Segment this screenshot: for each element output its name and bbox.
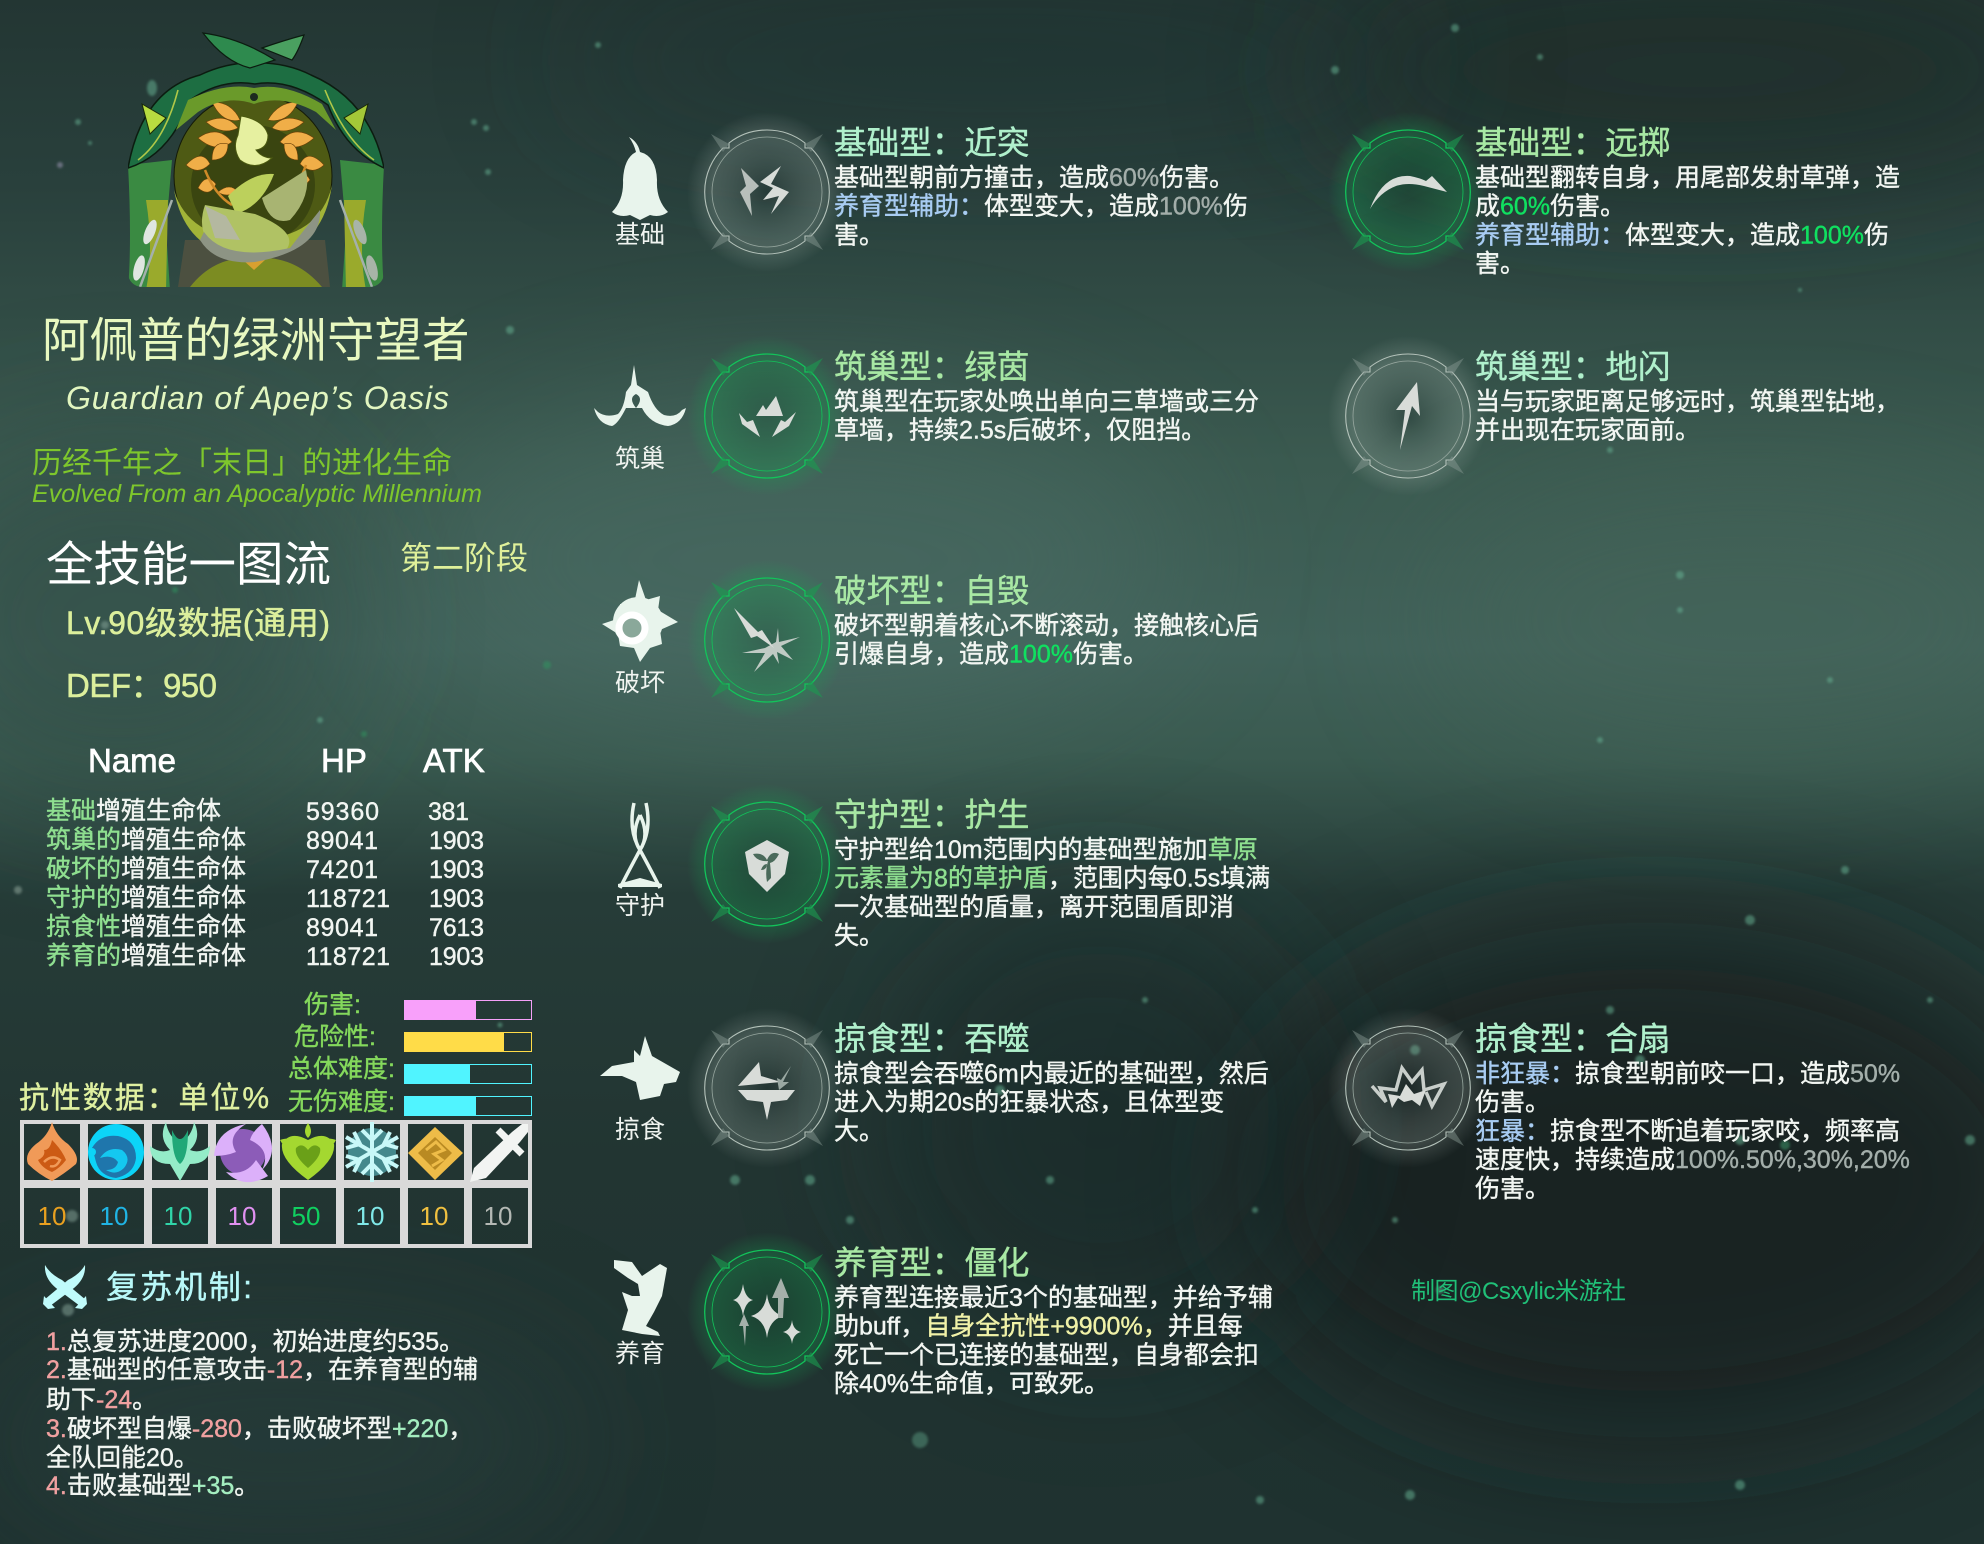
skill: basic melee — [687, 112, 1248, 272]
icon: pyro — [27, 1122, 77, 1181]
enemy type: guardian: 守护 — [615, 892, 665, 920]
skill: nest mycelium — [687, 336, 1259, 496]
stats table: ATK — [423, 742, 485, 779]
enemy type: basic — [612, 137, 668, 249]
rating bars: 总体难度: — [288, 1055, 395, 1083]
rating bars: 伤害: — [304, 991, 361, 1019]
stats table: 筑巢的增殖生命体 — [46, 826, 246, 854]
rating bars — [288, 991, 532, 1116]
skill: basic ranged: 养育型辅助：体型变大，造成100%伤 — [1475, 221, 1889, 249]
skill: wrecker self-destruct: 破坏型朝着核心不断滚动，接触核心后 — [834, 612, 1259, 640]
level label: Lv.90级数据(通用) — [66, 605, 330, 641]
skill: nest mycelium: 筑巢型在玩家处唤出单向三草墙或三分 — [834, 388, 1259, 416]
skill: predator snap: 掠食型：合扇 — [1475, 1020, 1670, 1057]
skill: basic ranged: 基础型：远掷 — [1475, 124, 1670, 161]
icon: hydro — [88, 1124, 144, 1180]
resistance table: 10 — [38, 1201, 66, 1231]
resistance table: 10 — [100, 1201, 128, 1231]
skill: wrecker self-destruct: 破坏型：自毁 — [834, 572, 1029, 609]
stats table: 89041 — [306, 827, 378, 855]
stats table: HP — [321, 742, 367, 779]
stats table: 7613 — [429, 914, 484, 942]
stats table: 74201 — [306, 856, 378, 884]
skill: predator snap: 狂暴：掠食型不断追着玩家咬，频率高 — [1475, 1117, 1900, 1145]
skill icon: lightning — [687, 112, 847, 272]
skill: guardian shield — [687, 784, 1270, 950]
enemy type: nest — [594, 365, 686, 473]
revival list: 3.破坏型自爆-280，击败破坏型+220， — [46, 1415, 473, 1443]
enemy type: nurturer — [614, 1260, 667, 1368]
revival list: 1.总复苏进度2000，初始进度约535。 — [46, 1328, 464, 1356]
tagline: Chinese: 历经千年之「末日」的进化生命 — [32, 447, 452, 480]
skill: guardian shield: 守护型：护生 — [834, 796, 1029, 833]
stats table: 118721 — [306, 943, 390, 971]
skill: basic melee: 基础型朝前方撞击，造成60%伤害。 — [834, 164, 1234, 192]
credit: 制图@Csxylic米游社 — [1411, 1278, 1626, 1305]
enemy type: predator — [600, 1036, 680, 1144]
resistance table: 10 — [164, 1201, 192, 1231]
resistance table: 10 — [420, 1201, 448, 1231]
revival list: 4.击败基础型+35。 — [46, 1472, 259, 1500]
stats table: 掠食性增殖生命体 — [46, 913, 246, 941]
stats table: 基础增殖生命体 — [46, 797, 221, 825]
stats table: 1903 — [429, 943, 484, 971]
revival list: 2.基础型的任意攻击-12，在养育型的辅 — [46, 1356, 478, 1384]
skill: predator snap: 速度快，持续造成100%.50%,30%,20% — [1475, 1146, 1910, 1174]
revival list — [46, 1328, 478, 1500]
resistance table: 10 — [228, 1201, 256, 1231]
skill icon: spikes — [687, 336, 847, 496]
skill: guardian shield: 失。 — [834, 922, 884, 950]
stats table: 381 — [428, 798, 469, 826]
skill: basic ranged — [1328, 112, 1900, 278]
enemy type: wrecker — [602, 580, 678, 697]
resistance heading: 抗性数据：单位% — [19, 1082, 269, 1115]
skill: wrecker self-destruct — [687, 560, 1259, 720]
skill icon: up arrow — [1328, 336, 1488, 496]
stage label: 第二阶段 — [400, 540, 528, 576]
icon: physical sword — [470, 1124, 528, 1182]
enemy type: guardian — [615, 803, 665, 920]
skill: predator devour: 大。 — [834, 1117, 884, 1145]
revival list: 全队回能20。 — [46, 1444, 199, 1472]
skill: guardian shield: 一次基础型的盾量，离开范围盾即消 — [834, 893, 1234, 921]
portrait: Guardian of Apep's Oasis — [128, 33, 384, 290]
stats table: 1903 — [429, 827, 484, 855]
skill icon: shield — [687, 784, 847, 944]
icon: spiked ball — [602, 580, 678, 662]
stats table: Name — [88, 742, 176, 779]
stats table: 破坏的增殖生命体 — [46, 855, 246, 883]
skill: nest mycelium: 筑巢型：绿茵 — [834, 348, 1029, 385]
icon: cryo — [346, 1122, 398, 1182]
stats table: 守护的增殖生命体 — [46, 884, 246, 912]
icon: electro — [214, 1124, 272, 1182]
skill icon: sparkles — [687, 1232, 847, 1392]
enemy type: nurturer: 养育 — [615, 1340, 665, 1368]
skill: nest burrow flash: 并出现在玩家面前。 — [1475, 417, 1700, 445]
resistance table: 10 — [484, 1201, 512, 1231]
stats table: 1903 — [429, 885, 484, 913]
skill: nest burrow flash: 当与玩家距离足够远时，筑巢型钻地， — [1475, 388, 1900, 416]
title: Chinese name: 阿佩普的绿洲守望者 — [42, 315, 470, 368]
skill: nurturer petrify: 养育型：僵化 — [834, 1244, 1029, 1281]
skill: nurturer petrify: 助buff，自身全抗性+9900%，并且每 — [834, 1313, 1243, 1341]
stats table — [46, 742, 485, 971]
skill: basic melee: 养育型辅助：体型变大，造成100%伤 — [834, 193, 1248, 221]
icon: geo — [408, 1127, 463, 1180]
skill icon: curved arrow — [1328, 112, 1488, 272]
resistance table: 50 — [292, 1201, 320, 1231]
skill: nest burrow flash: 筑巢型：地闪 — [1475, 348, 1670, 385]
stats table: 89041 — [306, 914, 378, 942]
skill: nurturer petrify: 除40%生命值，可致死。 — [834, 1370, 1109, 1398]
skill icon: bite — [687, 1008, 847, 1168]
tagline: English: Evolved From an Apocalyptic Millennium — [32, 480, 482, 508]
stats table: 59360 — [306, 798, 379, 826]
stats table: 养育的增殖生命体 — [46, 942, 246, 970]
resistance table — [20, 1120, 532, 1248]
icon: bell — [612, 137, 668, 220]
skill: predator devour: 掠食型：吞噬 — [834, 1020, 1029, 1057]
skill: nest mycelium: 草墙，持续2.5s后破坏，仅阻挡。 — [834, 417, 1206, 445]
icon: crossed swords — [43, 1265, 87, 1309]
enemy type: basic: 基础 — [615, 221, 665, 249]
skill: basic melee: 害。 — [834, 221, 884, 249]
enemy type: nest: 筑巢 — [615, 445, 665, 473]
skill icon: jaws — [1328, 1008, 1488, 1168]
skill: predator snap: 伤害。 — [1475, 1175, 1550, 1203]
skill: predator devour: 掠食型会吞噬6m内最近的基础型，然后 — [834, 1060, 1269, 1088]
resistance table: 10 — [356, 1201, 384, 1231]
skill: predator snap — [1328, 1008, 1910, 1203]
icon: shark — [600, 1036, 680, 1100]
skill: predator devour — [687, 1008, 1269, 1168]
skill: predator snap: 伤害。 — [1475, 1089, 1550, 1117]
icon: anemo — [150, 1122, 210, 1181]
skill: nurturer petrify: 养育型连接最近3个的基础型，并给予辅 — [834, 1284, 1273, 1312]
skill: guardian shield: 元素量为8的草护盾，范围内每0.5s填满 — [834, 865, 1270, 893]
skill: basic ranged: 害。 — [1475, 250, 1525, 278]
skill: predator devour: 进入为期20s的狂暴状态，且体型变 — [834, 1089, 1224, 1117]
icon: braid — [620, 803, 660, 888]
skill: guardian shield: 守护型给10m范围内的基础型施加草原 — [834, 836, 1258, 864]
enemy type: wrecker: 破坏 — [615, 669, 665, 697]
icon: dendro — [280, 1123, 336, 1180]
skill icon: burst — [687, 560, 847, 720]
subtitle: English name: Guardian of Apep’s Oasis — [66, 380, 449, 416]
heading: all-skills chart: 全技能一图流 — [46, 539, 331, 592]
rating bars: 危险性: — [294, 1023, 376, 1051]
skill: basic ranged: 成60%伤害。 — [1475, 193, 1625, 221]
stats table: 1903 — [429, 856, 484, 884]
skill: basic ranged: 基础型翻转自身，用尾部发射草弹，造 — [1475, 164, 1900, 192]
skill: wrecker self-destruct: 引爆自身，造成100%伤害。 — [834, 641, 1148, 669]
heading: revival mechanism: 复苏机制: — [106, 1269, 252, 1305]
skill: nurturer petrify: 死亡一个已连接的基础型，自身都会扣 — [834, 1341, 1259, 1369]
skill: nurturer petrify — [687, 1232, 1273, 1398]
skill: basic melee: 基础型：近突 — [834, 124, 1029, 161]
icon: figure — [614, 1260, 667, 1336]
revival list: 助下-24。 — [46, 1386, 157, 1414]
skill: predator snap: 非狂暴：掠食型朝前咬一口，造成50% — [1475, 1060, 1900, 1088]
defence value: DEF：950 — [66, 667, 217, 704]
enemy type: predator: 掠食 — [615, 1116, 665, 1144]
rating bars: 无伤难度: — [288, 1088, 395, 1116]
stats table: 118721 — [306, 885, 390, 913]
icon: nest — [594, 365, 686, 426]
skill: nest burrow flash — [1328, 336, 1900, 496]
